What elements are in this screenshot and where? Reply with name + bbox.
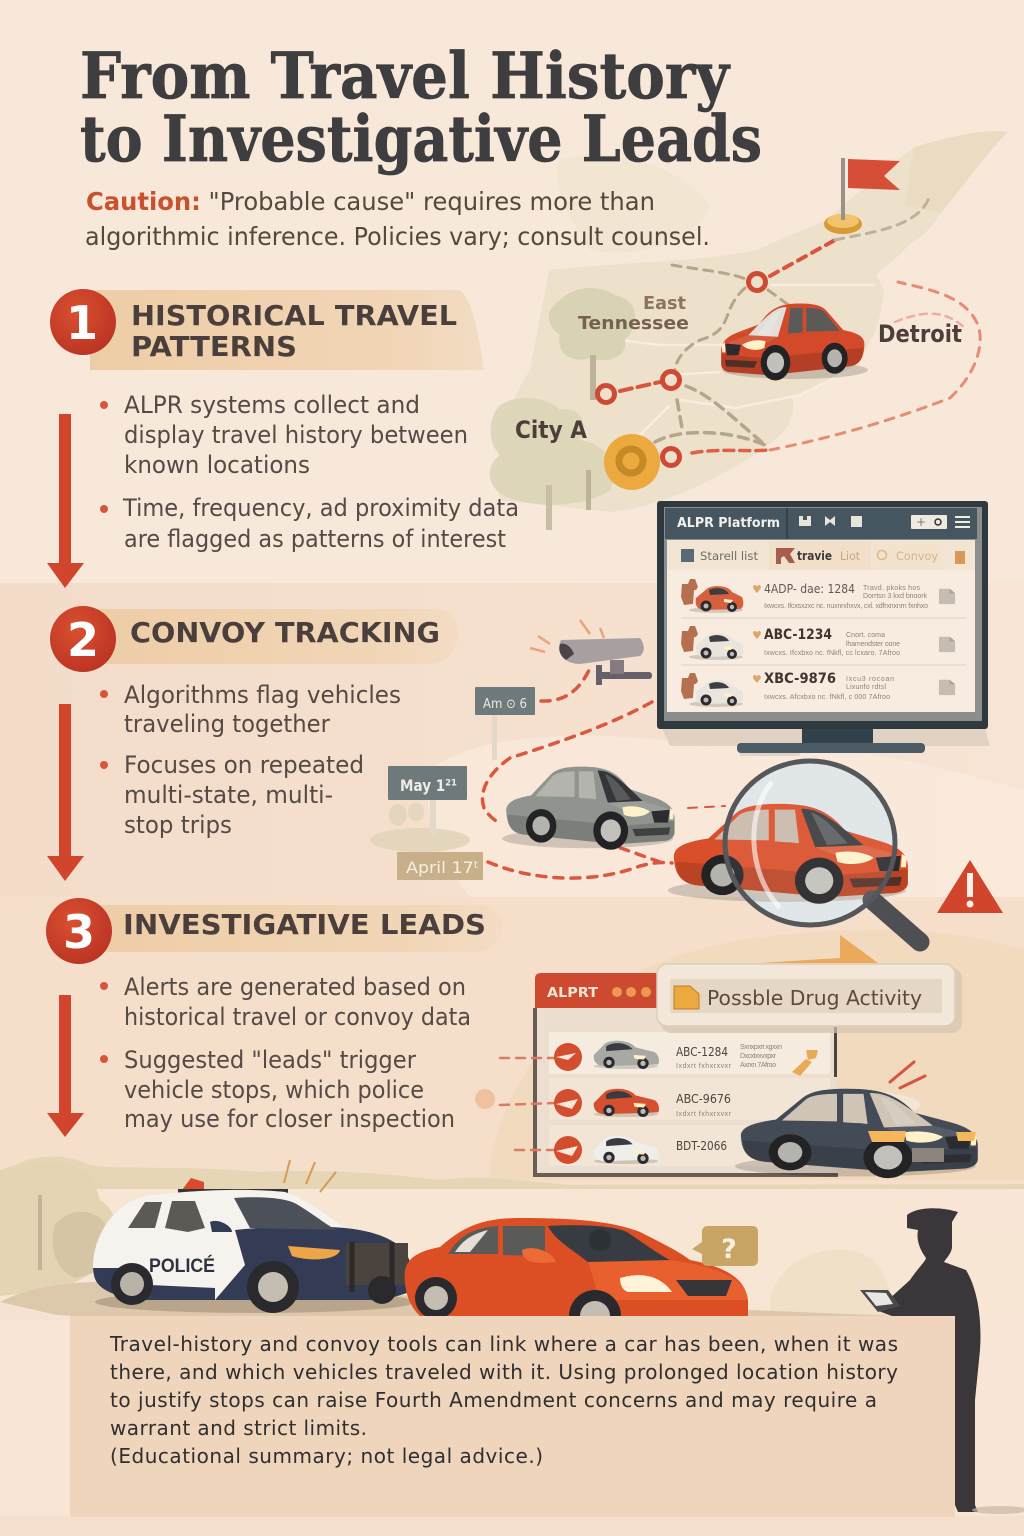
speech bubble: question mark	[692, 1226, 758, 1266]
map labels: Detroit	[878, 320, 962, 348]
monitor: ALPR platform: Travd. pkoks hos	[863, 585, 920, 592]
alert panel: Ixdxrt fxhxrxvxr	[676, 1111, 732, 1118]
arrow: orange section 3	[760, 935, 878, 963]
police car	[93, 1160, 415, 1313]
monitor: ALPR platform: Ixwcxs. Ifcxbxo nc. fNkfl, cc lcxaro. 7Afroo	[764, 650, 900, 657]
monitor: ALPR platform: Starell list	[700, 549, 758, 563]
sign: May	[388, 766, 467, 835]
sign: Am	[475, 687, 535, 760]
arrow: section 2	[47, 704, 84, 881]
section 3 bullets	[100, 973, 471, 1133]
alert panel: Ixdxrt fxhxrxvxr	[676, 1063, 732, 1070]
map trees	[490, 288, 635, 530]
section 2 heading: CONVOY TRACKING	[130, 616, 440, 649]
section 2 bullets: stop trips	[124, 811, 232, 839]
section 1 heading	[50, 289, 484, 370]
monitor: ALPR platform: ♥	[752, 629, 762, 642]
section 2 bullets: Focuses on repeated	[124, 751, 364, 779]
alert panel: ABC-9676	[676, 1092, 731, 1106]
ground strip and tree line	[0, 1156, 1024, 1320]
warning triangle	[937, 860, 1003, 913]
summary text panel: warrant and strict limits.	[110, 1416, 367, 1440]
alert panel: Dxcxtxxvxpxr	[740, 1053, 777, 1060]
icon: gold location coin	[604, 434, 660, 490]
section 1 bullets	[100, 391, 519, 553]
section 2 heading: 2	[67, 613, 99, 667]
section 2 heading	[50, 606, 458, 672]
magnifying glass	[725, 761, 920, 942]
monitor: ALPR platform: +	[916, 515, 926, 529]
monitor: ALPR platform: lhamendster oone	[846, 641, 900, 648]
alert panel: ABC-1284	[676, 1045, 728, 1059]
summary text panel: to justify stops can raise Fourth Amendment concerns and may require a	[110, 1388, 877, 1412]
section 3 bullets: may use for closer inspection	[124, 1105, 455, 1133]
summary text panel: (Educational summary; not legal advice.)	[110, 1444, 543, 1468]
summary text panel: there, and which vehicles traveled with it. Using prolonged location history	[110, 1360, 898, 1384]
monitor: ALPR platform: Ixwcxs. Ifcxsxzxc nc. nuxnrxhxvx, cxl. xdfrxnxnrn fxnhxo	[764, 603, 928, 610]
icon: flag pin	[824, 158, 900, 234]
section 1 bullets: are flagged as patterns of interest	[124, 525, 506, 553]
section 3 heading: 3	[63, 905, 95, 959]
monitor: ALPR platform: Liot	[840, 549, 860, 563]
caution note	[85, 187, 710, 251]
camera	[530, 620, 652, 685]
section 3 bullets: Suggested "leads" trigger	[124, 1046, 416, 1074]
section 1 heading: 1	[66, 296, 98, 350]
map land mass	[497, 131, 1008, 512]
alert panel: Axrxn 7Afroo	[740, 1062, 776, 1069]
section 3 bullets: Alerts are generated based on	[124, 973, 466, 1001]
convoy route dashes	[482, 668, 725, 878]
red car on map	[721, 303, 868, 380]
sign: April: April 17	[406, 858, 468, 877]
monitor: ALPR platform: 4ADP- dae: 1284	[764, 582, 855, 596]
section 1 bullets: Time, frequency, ad proximity data	[122, 494, 519, 522]
section 3 bullets: vehicle stops, which police	[124, 1076, 424, 1104]
monitor: ALPR platform: travie	[797, 549, 832, 563]
map markers	[598, 274, 766, 466]
section 1 bullets: ALPR systems collect and	[124, 391, 420, 419]
sign: Am: Am ⊙ 6	[483, 697, 527, 712]
dark car with sparks	[735, 1062, 978, 1178]
monitor: ALPR platform: XBC-9876	[764, 671, 836, 687]
section 1 bullets: known locations	[124, 451, 310, 479]
summary text panel: Travel-history and convoy tools can link where a car has been, when it was	[109, 1332, 898, 1356]
monitor: ALPR platform	[657, 501, 990, 756]
sign: May: May 1²¹	[400, 776, 457, 795]
section 1 bullets: display travel history between	[124, 421, 468, 449]
monitor: ALPR platform: Ixcu3 rocoan	[846, 676, 894, 683]
alert panel: ALPRT	[547, 986, 598, 1001]
caution note: algorithmic inference. Policies vary; consult counsel.	[85, 222, 710, 251]
monitor: ALPR platform: ♥	[752, 583, 762, 596]
map labels: City A	[515, 416, 587, 444]
section 3 heading	[46, 898, 502, 964]
red car under magnifier	[668, 759, 908, 927]
section 1 heading: HISTORICAL TRAVEL	[131, 299, 457, 332]
monitor: ALPR platform: Lixunfo rdtsl	[846, 684, 886, 691]
monitor: ALPR platform: Ixwcxs. Afcxbxo nc. fNkfl, c 000 7Afroo	[764, 694, 890, 701]
monitor: ALPR platform: Cnort. coma	[846, 632, 885, 639]
section 2 bullets	[100, 681, 401, 839]
popup: possible drug activity	[657, 964, 962, 1033]
caution note: Caution: "Probable cause" requires more than	[86, 187, 655, 216]
section 3 bullets: historical travel or convoy data	[124, 1003, 471, 1031]
alert panel: Sxnxpxrt xgxxn	[740, 1044, 782, 1051]
map labels: Tennessee	[578, 313, 689, 334]
title	[80, 39, 762, 177]
section 2 bullets: Algorithms flag vehicles	[124, 681, 401, 709]
title: to Investigative Leads	[80, 102, 762, 177]
police car: POLICÉ	[149, 1255, 215, 1277]
section 2 bullets: multi-state, multi-	[124, 781, 333, 809]
gray car	[502, 767, 675, 850]
sign: April	[397, 852, 483, 880]
summary text panel	[70, 1316, 955, 1517]
popup: possible drug activity: Possble Drug Activity	[707, 986, 922, 1010]
monitor: ALPR platform: Convoy	[896, 549, 938, 563]
sign: April: t	[474, 860, 478, 871]
arrow: section 1	[47, 414, 84, 588]
title: From Travel History	[80, 39, 731, 114]
alert panel	[475, 973, 838, 1175]
map labels	[515, 293, 962, 444]
monitor: ALPR platform: ABC-1234	[764, 627, 832, 643]
section 3 heading: INVESTIGATIVE LEADS	[123, 908, 486, 941]
map routes	[620, 195, 980, 453]
monitor: ALPR platform: ♥	[752, 673, 762, 686]
monitor: ALPR platform: ALPR Platform	[677, 515, 780, 531]
shrub	[370, 803, 470, 852]
police officer	[860, 1208, 1024, 1514]
speech bubble: question mark: ?	[721, 1234, 737, 1265]
monitor: ALPR platform: Dorrtsn 3 kxd bnoork	[863, 593, 928, 600]
orange car	[405, 1218, 748, 1342]
section 2 bullets: traveling together	[124, 710, 330, 738]
map labels: East	[643, 293, 686, 314]
arrow: section 3	[47, 995, 84, 1137]
alert panel: BDT-2066	[676, 1139, 727, 1153]
section 1 heading: PATTERNS	[131, 330, 297, 363]
